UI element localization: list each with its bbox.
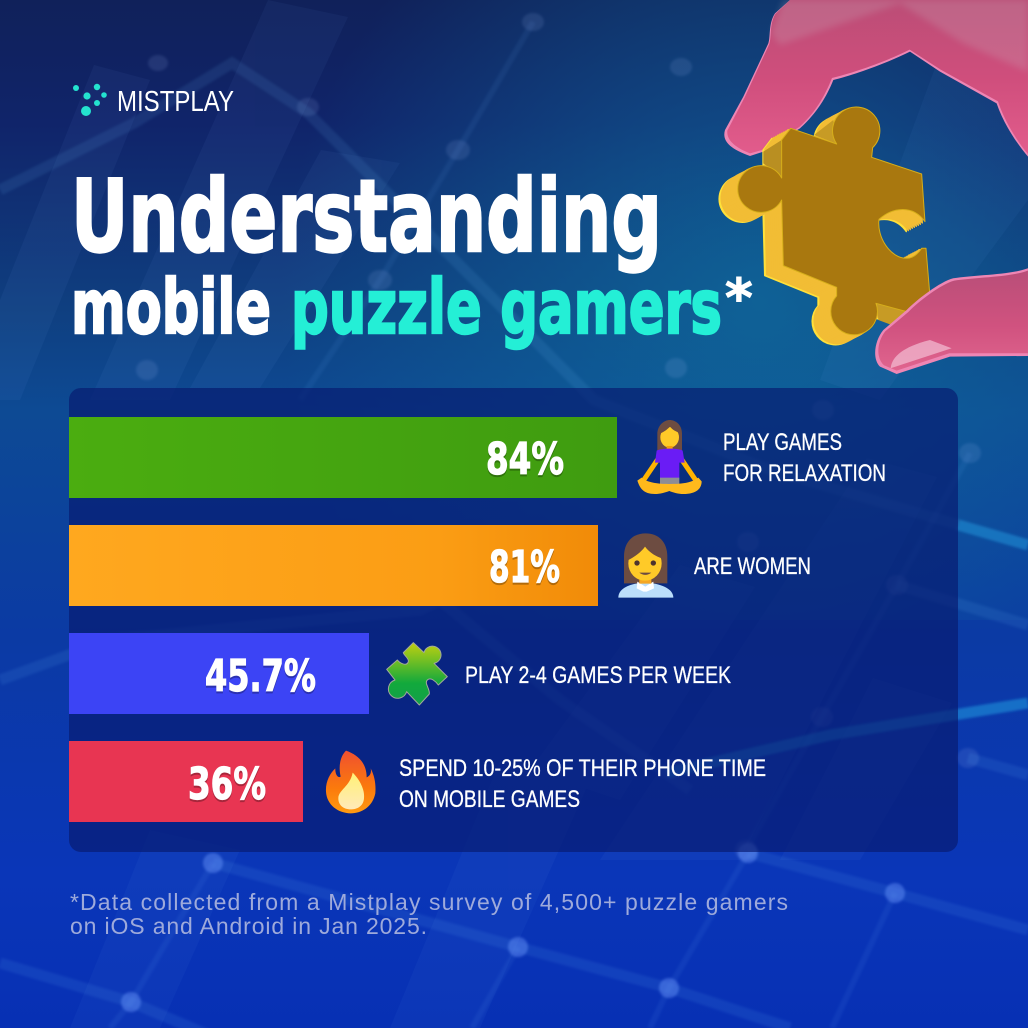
icon: fire [326,751,376,813]
bar: women 81% [69,525,598,606]
bar: phone time 36%: 36% [188,759,266,810]
bar: phone time 36% [69,741,303,822]
panel: stats [69,388,958,852]
footnote: on iOS and Android in Jan 2025. [70,913,427,939]
title [71,158,753,351]
bar: relaxation 84%: 84% [486,434,564,485]
footnote: *Data collected from a Mistplay survey of 4,500+ puzzle gamers [70,889,788,915]
title: Understanding [71,158,662,275]
bar: relaxation 84% [69,417,617,498]
puzzle piece [719,107,930,345]
label: games per week: PLAY 2-4 GAMES PER WEEK [465,662,731,689]
bar: women 81%: 81% [489,542,560,593]
icon: woman [618,533,673,598]
lower finger [875,268,1028,374]
title: * [725,268,753,329]
upper finger [724,0,1028,157]
label: women: ARE WOMEN [694,553,811,580]
label: relaxation: FOR RELAXATION [723,460,886,487]
bar: games per week 45.7% [69,633,369,714]
title: mobile [71,263,271,351]
icon: meditating woman [637,420,702,494]
title: puzzle gamers [291,263,722,351]
logo: Mistplay: MISTPLAY [117,86,234,118]
label: phone time [399,755,766,813]
logo: Mistplay [73,84,234,118]
bar: games per week 45.7%: 45.7% [205,651,316,702]
label: relaxation: PLAY GAMES [723,429,842,456]
icon: green puzzle piece [387,643,447,705]
label: phone time: SPEND 10-25% OF THEIR PHONE TIME [399,755,766,782]
footnote [70,889,788,939]
label: phone time: ON MOBILE GAMES [399,786,580,813]
label: relaxation [723,429,886,487]
illustration: hand holding puzzle piece [719,0,1028,374]
